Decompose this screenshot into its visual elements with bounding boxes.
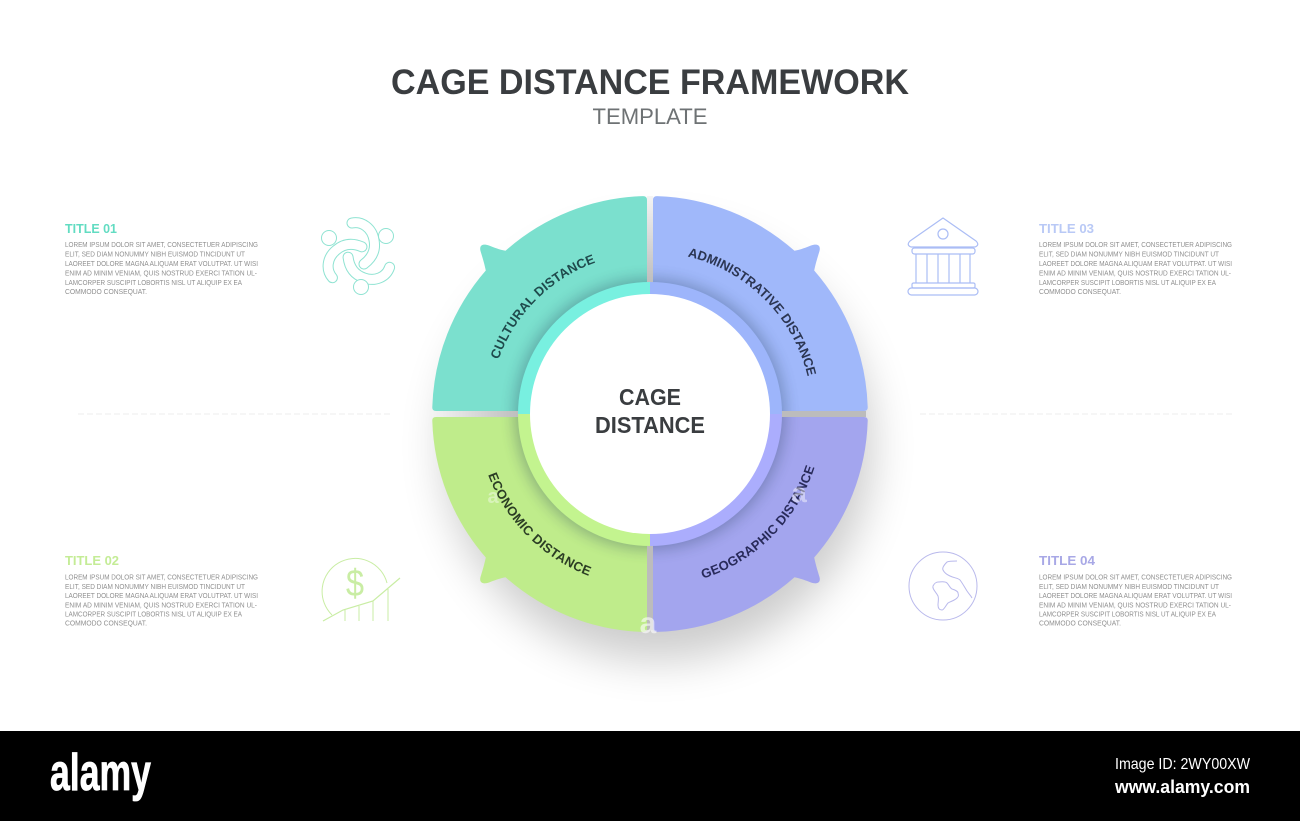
panel: title 01 text block: TITLE 01 bbox=[65, 221, 117, 236]
watermark glyphs: a bbox=[640, 607, 657, 640]
label: administrative distance: ADMINISTRATIVE DISTANCE bbox=[688, 248, 816, 376]
panel: title 02 text block: LAOREET DOLORE MAGNA ALIQUAM ERAT VOLUTPAT. UT WISI bbox=[65, 591, 258, 600]
icon: government building bbox=[908, 218, 978, 295]
panel: title 01 text block: COMMODO CONSEQUAT. bbox=[65, 287, 147, 296]
label: economic distance: ECONOMIC DISTANCE bbox=[488, 472, 592, 576]
panel: title 02 text block bbox=[65, 553, 258, 628]
panel: title 04 text block: ELIT, SED DIAM NONUMMY NIBH EUISMOD TINCIDUNT UT bbox=[1039, 582, 1219, 591]
ring: green quarter bbox=[518, 414, 650, 546]
subtitle: TEMPLATE bbox=[592, 104, 708, 129]
left divider bbox=[78, 413, 392, 415]
image id: Image ID: 2WY00XW bbox=[1115, 756, 1251, 773]
title: CAGE DISTANCE FRAMEWORK bbox=[391, 63, 909, 102]
panel: title 03 text block: LOREM IPSUM DOLOR SIT AMET, CONSECTETUER ADIPISCING bbox=[1039, 240, 1232, 249]
center white circle bbox=[530, 294, 770, 534]
panel: title 01 text block bbox=[65, 221, 258, 296]
icon: dollar growth chart: $ bbox=[346, 563, 364, 605]
panel: title 03 text block: TITLE 03 bbox=[1039, 221, 1094, 236]
panel: title 02 text block: LOREM IPSUM DOLOR SIT AMET, CONSECTETUER ADIPISCING bbox=[65, 572, 258, 582]
inner shadow on segments bbox=[514, 278, 786, 550]
segment gaps bbox=[432, 196, 866, 630]
panel: title 03 text block: LAOREET DOLORE MAGNA ALIQUAM ERAT VOLUTPAT. UT WISI bbox=[1039, 259, 1232, 268]
panel: title 02 text block: LAMCORPER SUSCIPIT LOBORTIS NISL UT ALIQUIP EX EA bbox=[65, 610, 242, 618]
icon: people swirl bbox=[321, 223, 394, 294]
segment: cultural distance bbox=[432, 196, 647, 411]
label: geographic distance: GEOGRAPHIC DISTANCE bbox=[702, 465, 814, 578]
watermark glyphs: a bbox=[487, 486, 499, 508]
center label bbox=[595, 384, 705, 438]
icon: dollar growth chart bbox=[322, 558, 400, 621]
panel: title 04 text block: LOREM IPSUM DOLOR SIT AMET, CONSECTETUER ADIPISCING bbox=[1039, 572, 1232, 582]
panel: title 01 text block: ENIM AD MINIM VENIAM, QUIS NOSTRUD EXERCI TATION UL- bbox=[65, 268, 257, 278]
panel: title 04 text block: ENIM AD MINIM VENIAM, QUIS NOSTRUD EXERCI TATION UL- bbox=[1039, 600, 1231, 610]
panel: title 02 text block: TITLE 02 bbox=[65, 553, 119, 568]
panel: title 02 text block: COMMODO CONSEQUAT. bbox=[65, 618, 147, 628]
panel: title 04 text block bbox=[1039, 553, 1232, 628]
center label: CAGE bbox=[619, 384, 681, 410]
right divider bbox=[920, 413, 1233, 415]
panel: title 03 text block: COMMODO CONSEQUAT. bbox=[1039, 287, 1121, 296]
ring: teal quarter bbox=[518, 282, 650, 414]
site url: www.alamy.com bbox=[1114, 777, 1250, 797]
panel: title 01 text block: ELIT, SED DIAM NONUMMY NIBH EUISMOD TINCIDUNT UT bbox=[65, 250, 245, 258]
panel: title 04 text block: LAOREET DOLORE MAGNA ALIQUAM ERAT VOLUTPAT. UT WISI bbox=[1039, 591, 1232, 600]
logo: alamy: alamy bbox=[50, 744, 151, 802]
segment: administrative distance bbox=[653, 196, 868, 411]
panel: title 01 text block: LAMCORPER SUSCIPIT LOBORTIS NISL UT ALIQUIP EX EA bbox=[65, 278, 242, 287]
panel: title 03 text block bbox=[1039, 221, 1232, 296]
panel: title 04 text block: COMMODO CONSEQUAT. bbox=[1039, 618, 1121, 628]
panel: title 02 text block: ELIT, SED DIAM NONUMMY NIBH EUISMOD TINCIDUNT UT bbox=[65, 582, 245, 591]
panel: title 03 text block: ELIT, SED DIAM NONUMMY NIBH EUISMOD TINCIDUNT UT bbox=[1039, 250, 1219, 258]
watermark glyphs bbox=[487, 477, 807, 640]
footer bar bbox=[0, 731, 1300, 821]
ring: blue quarter bbox=[650, 282, 782, 414]
wheel drop shadow bbox=[444, 232, 872, 660]
panel: title 02 text block: ENIM AD MINIM VENIAM, QUIS NOSTRUD EXERCI TATION UL- bbox=[65, 600, 257, 610]
panel: title 01 text block: LAOREET DOLORE MAGNA ALIQUAM ERAT VOLUTPAT. UT WISI bbox=[65, 259, 258, 268]
panel: title 04 text block: LAMCORPER SUSCIPIT LOBORTIS NISL UT ALIQUIP EX EA bbox=[1039, 610, 1216, 618]
panel: central wheel bbox=[432, 196, 868, 640]
panel: title 03 text block: ENIM AD MINIM VENIAM, QUIS NOSTRUD EXERCI TATION UL- bbox=[1039, 268, 1231, 278]
icon: globe bbox=[909, 552, 977, 620]
segment: geographic distance bbox=[653, 417, 868, 632]
panel: title 03 text block: LAMCORPER SUSCIPIT LOBORTIS NISL UT ALIQUIP EX EA bbox=[1039, 278, 1216, 287]
panel: title 04 text block: TITLE 04 bbox=[1039, 553, 1096, 568]
label: cultural distance: CULTURAL DISTANCE bbox=[491, 254, 595, 358]
segment: economic distance bbox=[432, 417, 647, 632]
ring: purple quarter bbox=[650, 414, 782, 546]
center label: DISTANCE bbox=[595, 412, 705, 438]
watermark glyphs: a bbox=[791, 477, 807, 508]
panel: title 01 text block: LOREM IPSUM DOLOR SIT AMET, CONSECTETUER ADIPISCING bbox=[65, 240, 258, 249]
